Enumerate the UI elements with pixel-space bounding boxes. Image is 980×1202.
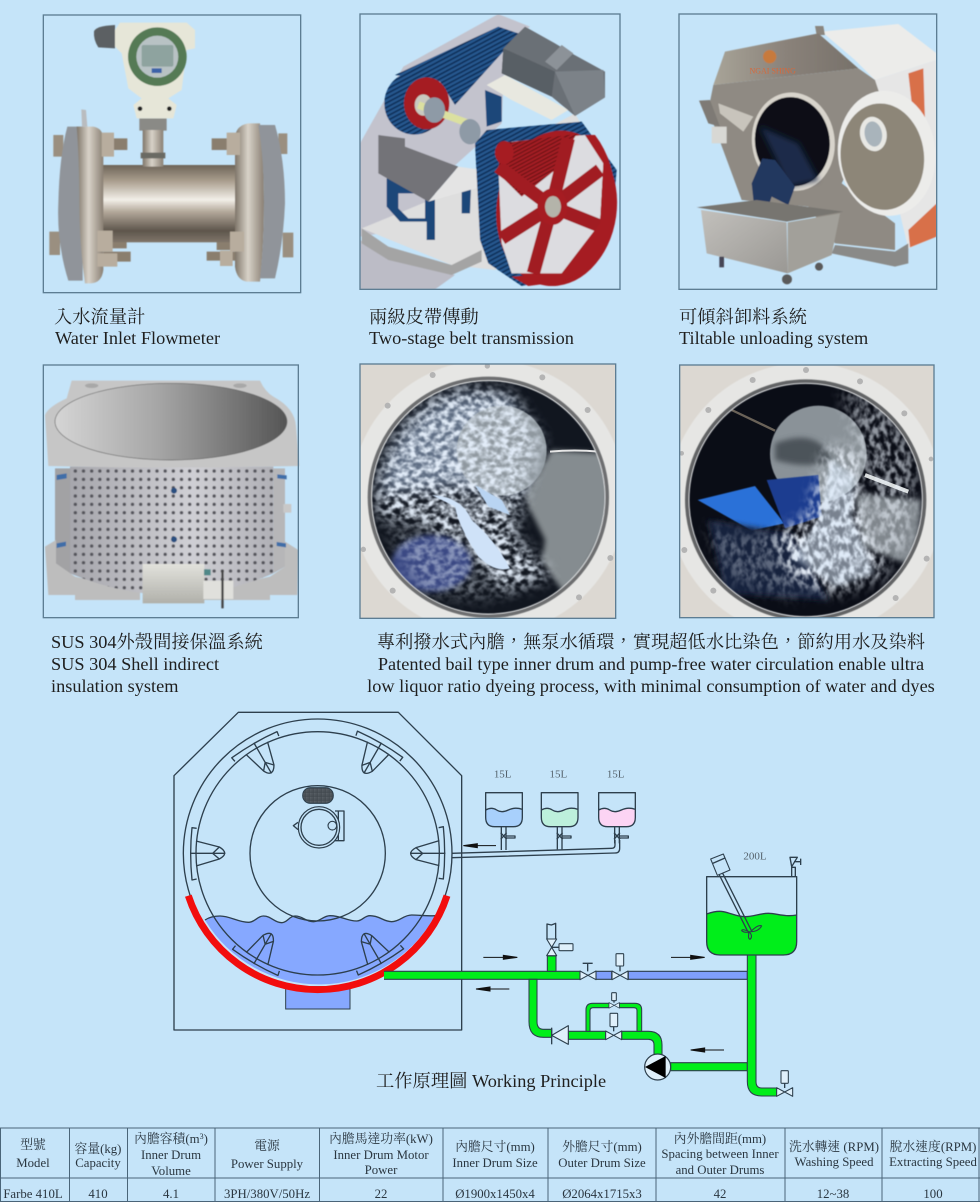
flow arrow: left, return line: [476, 987, 509, 991]
caption: patented bail type inner drum: Patented bail type inner drum and pump-free water circulation enable ultra: [378, 654, 924, 674]
additive tank 1: [486, 769, 522, 850]
data row: Ø1900x1450x4: [455, 1187, 535, 1201]
caption: tiltable unloading system: 可傾斜卸料系統: [679, 307, 808, 327]
caption: shell indirect insulation: insulation system: [51, 676, 178, 696]
photo: bail type inner drum, view one: [359, 363, 616, 619]
photo: SUS 304 shell insulation drum: [43, 365, 299, 618]
header row: 洗水轉速 (RPM): [789, 1139, 879, 1154]
pipes: green and blue: [384, 955, 777, 1096]
data row: 4.1: [163, 1187, 179, 1201]
caption: patented bail type inner drum: [367, 631, 935, 696]
image frame: [360, 14, 620, 289]
header row: Inner Drum Size: [452, 1156, 538, 1170]
image frame: [679, 14, 937, 289]
header row: Power: [365, 1163, 398, 1177]
additive tank 1: 15L: [494, 769, 512, 781]
header row: Volume: [151, 1164, 191, 1178]
data row: Farbe 410L: [3, 1187, 63, 1201]
photo: two-stage belt drive: [360, 14, 627, 294]
data row: 12~38: [817, 1187, 849, 1201]
header row: ): [204, 1132, 208, 1146]
diagram title: 工作原理圖 Working Principle: [376, 1071, 606, 1091]
data row: 100: [923, 1187, 943, 1201]
caption: water inlet flowmeter: Water Inlet Flowmeter: [55, 328, 220, 348]
header row: Model: [16, 1156, 50, 1170]
additive tank header pipe: [452, 840, 620, 858]
outer shell: [174, 712, 462, 1030]
image frame: [43, 15, 301, 293]
header row: 內膽容積(m: [134, 1132, 200, 1146]
header row: 電源: [254, 1139, 280, 1153]
caption: two-stage belt transmission: Two-stage belt transmission: [369, 328, 574, 348]
header row: Outer Drum Size: [558, 1156, 646, 1170]
photo: bail type inner drum, view two: [679, 364, 935, 618]
data row: 3PH/380V/50Hz: [224, 1187, 310, 1201]
data row: 42: [714, 1187, 726, 1201]
header row: Capacity: [75, 1156, 121, 1170]
caption: water inlet flowmeter: [54, 307, 220, 348]
heating jacket: [188, 896, 447, 990]
data row: 22: [375, 1187, 387, 1201]
header row: 內膽馬達功率(kW): [329, 1131, 433, 1146]
header row: 型號: [20, 1137, 46, 1152]
flow arrow: left, pump line: [691, 1048, 724, 1052]
drum paddles: [190, 729, 445, 977]
header row: Inner Drum Motor: [333, 1148, 429, 1162]
filter screen: [303, 788, 333, 803]
table grid: [0, 1128, 980, 1202]
diagram: main drum cross-section: [174, 712, 462, 1030]
caption: tiltable unloading system: [679, 307, 868, 348]
image frame: [360, 364, 616, 618]
header row: 外膽尺寸(mm): [562, 1139, 642, 1154]
sump and water: [286, 987, 350, 1009]
header row: Spacing between Inner: [661, 1147, 779, 1161]
mixing tank: [707, 851, 801, 955]
header row: 脫水速度(RPM): [890, 1139, 976, 1154]
mixing tank: 200L: [743, 851, 767, 863]
additive tank 3: 15L: [607, 769, 625, 781]
flow arrow: right, main line: [483, 955, 517, 959]
image frame: [43, 365, 298, 618]
check valve: [552, 1026, 568, 1044]
caption: water inlet flowmeter: 入水流量計: [54, 307, 145, 327]
valves: [547, 923, 793, 1096]
photo: tiltable unloading system: [679, 14, 942, 289]
caption: shell indirect insulation: SUS 304外殼間接保溫系統: [51, 632, 263, 652]
header row: and Outer Drums: [676, 1163, 764, 1177]
header row: Inner Drum: [141, 1148, 201, 1162]
caption: patented bail type inner drum: low liquor ratio dyeing process, with minimal consumption of water and dyes: [367, 676, 935, 696]
additive tank 3: [599, 769, 635, 843]
caption: patented bail type inner drum: 專利撥水式內膽，無泵水循環，實現超低水比染色，節約用水及染料: [377, 631, 925, 652]
brand text: NGAI SHING: [749, 66, 796, 75]
diagram: piping and tanks: [384, 769, 801, 1096]
additive tank 2: [541, 769, 578, 849]
additive tank 2: 15L: [549, 769, 567, 781]
header row: Power Supply: [231, 1157, 304, 1171]
flow arrow: right, to tank: [671, 955, 705, 959]
header row: 內膽尺寸(mm): [455, 1139, 535, 1154]
header row: 容量(kg): [75, 1142, 121, 1156]
pump: [645, 1054, 671, 1080]
header row: [16, 1131, 977, 1178]
specification table: [0, 1128, 980, 1202]
photo: water inlet flowmeter: [43, 15, 301, 293]
data row: Ø2064x1715x3: [562, 1187, 642, 1201]
image frame: [680, 365, 934, 618]
data row: [3, 1187, 943, 1201]
drum circles: [183, 719, 452, 988]
caption: tiltable unloading system: Tiltable unloading system: [679, 328, 868, 348]
caption: two-stage belt transmission: 兩級皮帶傳動: [369, 307, 479, 327]
header row: Washing Speed: [795, 1155, 874, 1169]
caption: two-stage belt transmission: [369, 307, 574, 348]
header row: Extracting Speed: [889, 1155, 977, 1169]
hub: [293, 807, 344, 848]
header row: 3: [200, 1132, 204, 1141]
data row: 410: [88, 1187, 108, 1201]
caption: shell indirect insulation: [51, 632, 263, 696]
header row: 內外膽間距(mm): [674, 1131, 766, 1146]
flow arrow: additive line: [463, 844, 496, 848]
caption: shell indirect insulation: SUS 304 Shell indirect: [51, 654, 219, 674]
